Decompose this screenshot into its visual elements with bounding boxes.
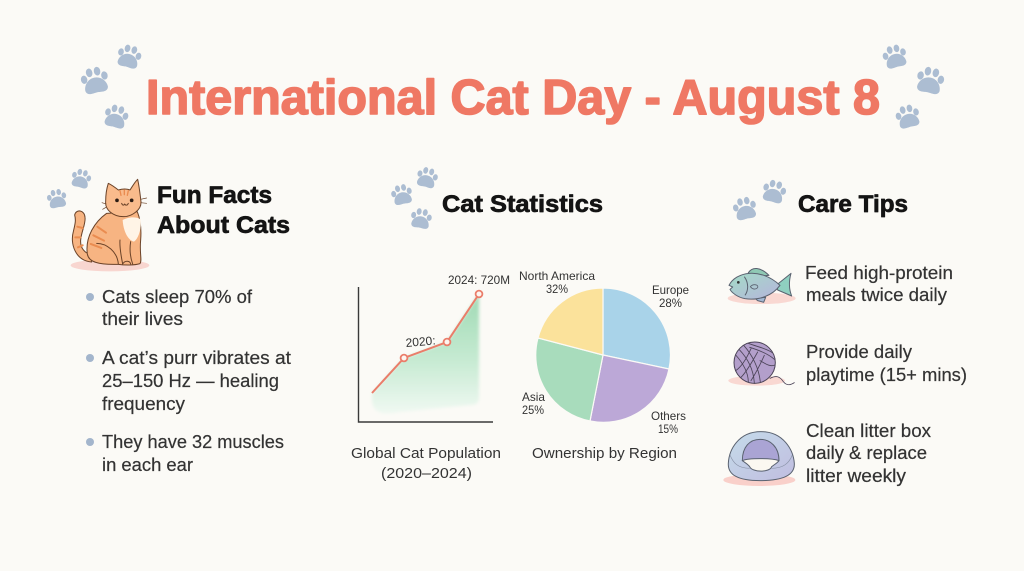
panel: cat statistics bbox=[351, 165, 689, 482]
icon: orange cat bbox=[71, 179, 149, 271]
heading: care tips: Care Tips bbox=[798, 191, 908, 218]
text: litter tip: daily & replace bbox=[806, 443, 927, 463]
text: feeding tip: meals twice daily bbox=[806, 285, 947, 305]
text: playtime tip: Provide daily bbox=[806, 342, 912, 362]
icon: litter box bbox=[723, 432, 795, 486]
fact: ear muscles: They have 32 muscles bbox=[102, 432, 284, 452]
title: International Cat Day - August 8 bbox=[146, 71, 880, 125]
pie chart: ownership by region: 15% bbox=[658, 422, 678, 436]
icon: statistics paws bbox=[390, 165, 440, 230]
line chart: global cat population: 2024: 720M bbox=[448, 273, 510, 287]
fact: sleep: their lives bbox=[102, 309, 183, 329]
fact: purr: 25–150 Hz — healing bbox=[102, 371, 279, 391]
text: feeding tip: Feed high-protein bbox=[805, 263, 953, 283]
text: feeding tip bbox=[805, 263, 953, 305]
fact: purr: frequency bbox=[102, 394, 185, 414]
heading: fun facts: Fun Facts bbox=[157, 182, 272, 209]
panel: fun facts bbox=[46, 167, 291, 475]
pie chart: ownership by region: 25% bbox=[522, 403, 544, 417]
line chart: global cat population bbox=[358, 273, 510, 422]
caption: pie chart: Ownership by Region bbox=[532, 446, 677, 462]
pie chart: ownership by region: North America bbox=[519, 269, 595, 283]
pie chart: ownership by region: 28% bbox=[659, 296, 682, 310]
pie chart: ownership by region: Others bbox=[651, 409, 686, 423]
fact: ear muscles: in each ear bbox=[102, 455, 193, 475]
icon: care tips paws bbox=[731, 178, 788, 221]
fact: purr: A cat’s purr vibrates at bbox=[102, 348, 291, 368]
fact: sleep bbox=[86, 287, 253, 329]
fact: purr bbox=[86, 348, 291, 414]
icon: title paws right bbox=[881, 43, 946, 130]
line chart: global cat population: 2020: bbox=[405, 333, 436, 350]
caption: line chart: (2020–2024) bbox=[381, 466, 472, 482]
pie chart: ownership by region: Asia bbox=[522, 390, 545, 404]
fact: sleep: Cats sleep 70% of bbox=[102, 287, 253, 307]
icon: yarn ball bbox=[728, 342, 794, 386]
pie chart: ownership by region: Europe bbox=[652, 283, 689, 297]
text: playtime tip: playtime (15+ mins) bbox=[806, 365, 967, 385]
fact: ear muscles bbox=[86, 432, 284, 475]
pie chart: ownership by region: 32% bbox=[546, 282, 568, 296]
panel: care tips bbox=[723, 178, 967, 486]
heading: fun facts bbox=[157, 182, 290, 239]
text: litter tip: Clean litter box bbox=[806, 421, 931, 441]
heading: cat statistics: Cat Statistics bbox=[442, 191, 603, 218]
icon: fun facts paws bbox=[46, 167, 93, 209]
text: playtime tip bbox=[806, 342, 967, 385]
text: litter tip bbox=[806, 421, 931, 486]
icon: title paws left bbox=[79, 43, 143, 130]
icon: fish bbox=[728, 268, 796, 304]
pie chart: ownership by region bbox=[519, 269, 689, 436]
caption: line chart bbox=[351, 446, 501, 482]
heading: fun facts: About Cats bbox=[157, 212, 290, 239]
caption: line chart: Global Cat Population bbox=[351, 446, 501, 462]
text: litter tip: litter weekly bbox=[806, 466, 906, 486]
